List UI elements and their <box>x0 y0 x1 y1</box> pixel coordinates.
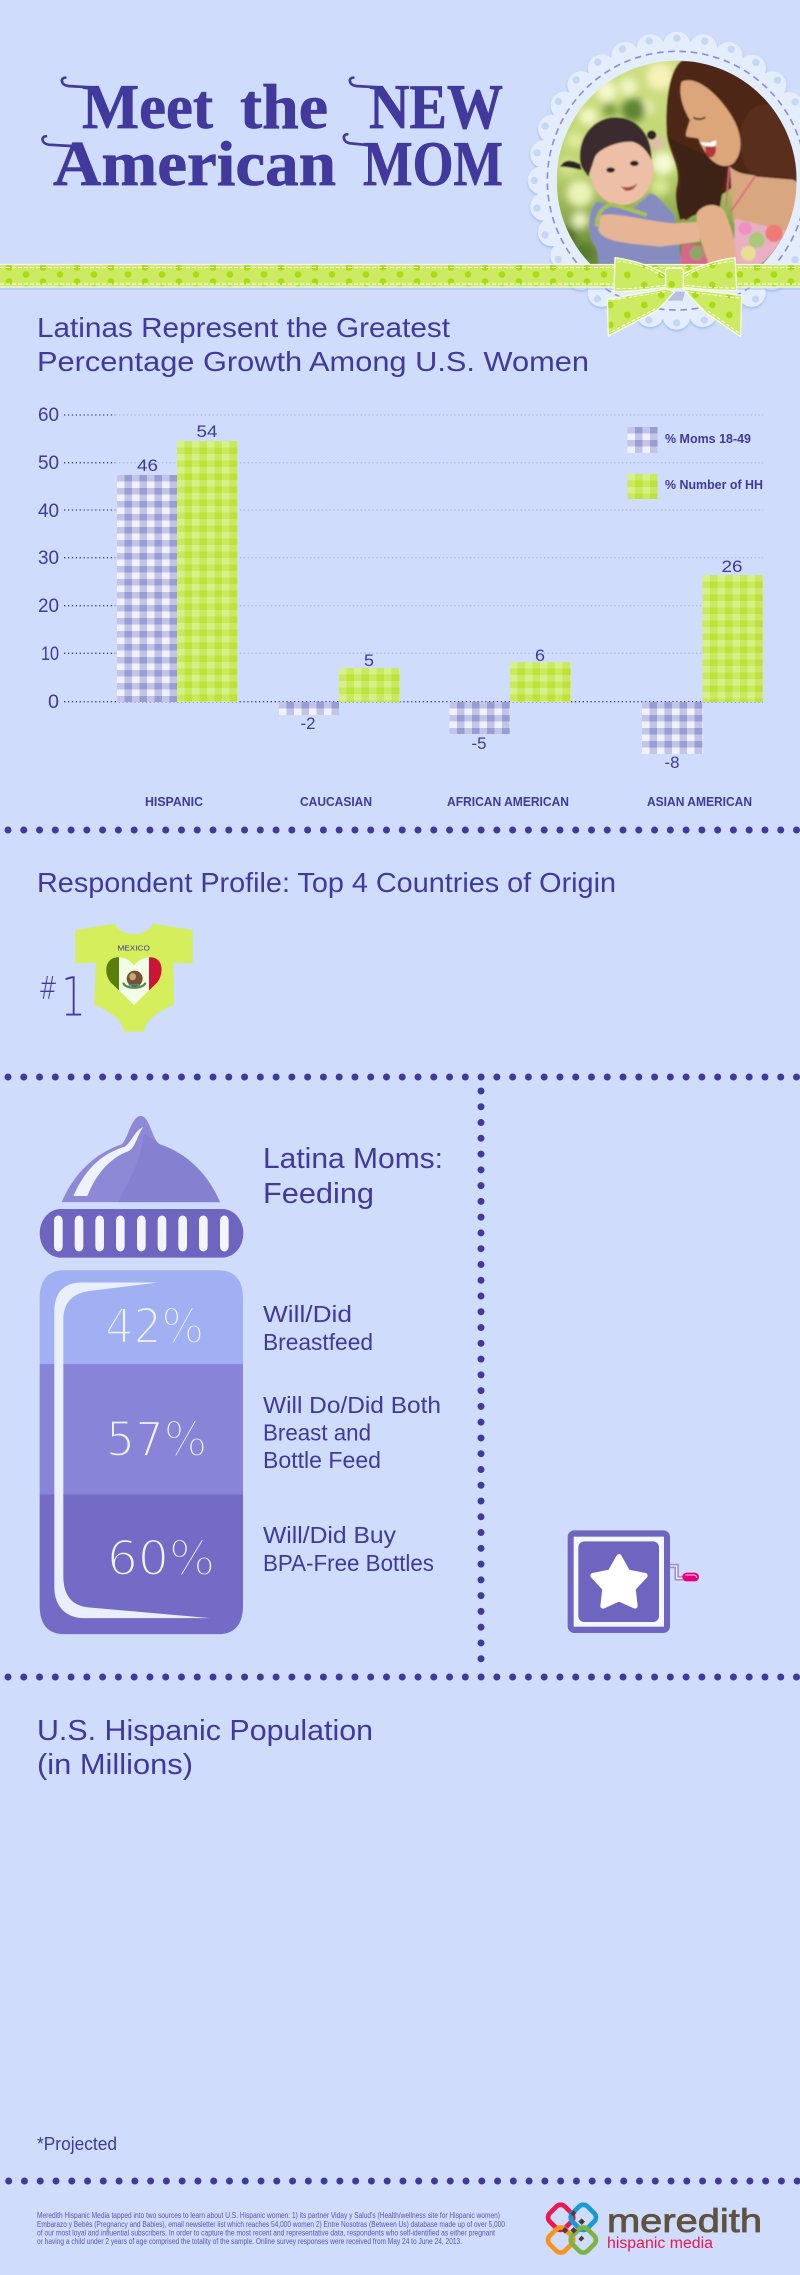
y-axis labels: 50 <box>38 453 59 474</box>
label: both breast and bottle: Will Do/Did Both <box>263 1392 441 1418</box>
label: breastfeed: Will/Did <box>263 1301 352 1327</box>
heading: U.S. Hispanic Population: U.S. Hispanic Population <box>37 1715 373 1747</box>
bow tails <box>607 289 742 337</box>
label: BPA-free bottles: BPA-Free Bottles <box>263 1550 434 1576</box>
y-axis labels: 30 <box>38 548 59 569</box>
heading: Percentage Growth Among U.S. Women: Percentage Growth Among U.S. Women <box>37 346 589 377</box>
rank: #1: 1 <box>60 963 86 1031</box>
methodology text: or having a child under 2 years of age comprised the totality of the sample. Online survey responses were received from May 24 to June 24, 2013. <box>37 2237 462 2246</box>
heading: U.S. Hispanic Population: (in Millions) <box>37 1749 193 1781</box>
methodology text <box>37 2211 506 2246</box>
value labels: 46 <box>137 456 158 475</box>
title: Meet the NEW American MOM <box>43 71 503 199</box>
methodology text: Meredith Hispanic Media tapped into two sources to learn about U.S. Hispanic women: 1) its partner Viday y Salud's (Health/wellness site for Hispanic women) <box>37 2211 500 2220</box>
y-axis labels: 0 <box>48 692 59 713</box>
bottle percentage: 57%: 57% <box>106 1412 207 1468</box>
title: Meet the NEW American MOM: NEW <box>369 71 503 142</box>
title: Meet the NEW American MOM: MOM <box>363 128 503 199</box>
category labels: CAUCASIAN <box>300 795 372 809</box>
bar chart <box>38 405 763 809</box>
value labels: -2 <box>300 714 316 733</box>
value labels: 54 <box>196 422 218 441</box>
bottle nipple <box>62 1116 220 1202</box>
bottle percentage: 60%: 60% <box>107 1531 215 1587</box>
methodology text: of our most loyal and influential subscribers. In order to capture the most recent and representative data, respondents who self-identified as either pregnant <box>37 2228 496 2238</box>
bottle percentage: 42%: 42% <box>105 1299 204 1355</box>
ribbon <box>0 264 800 290</box>
category labels: ASIAN AMERICAN <box>647 795 752 809</box>
methodology text: Embarazo y Bebés (Pregnancy and Babies), email newsletter list which reaches 54,000 women 2) Entre Nosotras (Between Us) database made up of over 5,000 <box>37 2220 506 2229</box>
icon: baby bottle <box>40 1116 243 1634</box>
label: both breast and bottle <box>263 1392 441 1473</box>
label: both breast and bottle: Bottle Feed <box>263 1447 381 1473</box>
heading: U.S. Hispanic Population <box>37 1715 373 1781</box>
title: Meet the NEW American MOM: the <box>240 71 328 142</box>
value labels: -8 <box>664 753 680 772</box>
bottle collar <box>40 1209 243 1258</box>
y-axis labels: 40 <box>38 501 59 522</box>
y-axis labels: 10 <box>41 644 59 665</box>
mother <box>666 57 800 220</box>
title: Meet the NEW American MOM: American <box>53 128 336 199</box>
doily lace <box>542 46 800 316</box>
label: both breast and bottle: Breast and <box>263 1420 371 1446</box>
label: breastfeed <box>263 1301 373 1355</box>
bars: Caucasian <box>279 668 400 715</box>
bars: Asian American <box>642 575 763 754</box>
logo: Meredith Hispanic Media: meredith <box>607 2202 762 2239</box>
value labels: 26 <box>722 557 742 576</box>
heading: Latina Moms: Feeding: Feeding <box>263 1178 374 1210</box>
label: BPA-free bottles: Will/Did Buy <box>263 1522 397 1548</box>
y-axis labels: 60 <box>38 405 59 426</box>
value labels: 6 <box>535 646 545 665</box>
legend: % Moms 18-49 <box>665 431 751 446</box>
heading: Latina Moms: Feeding: Latina Moms: <box>263 1143 443 1175</box>
logo: Meredith Hispanic Media <box>546 2202 762 2255</box>
bottle body <box>40 1270 243 1634</box>
bars: African American <box>450 662 571 734</box>
logo mark <box>546 2202 598 2255</box>
category labels: HISPANIC <box>145 795 203 809</box>
value labels <box>137 422 742 772</box>
icon: jack-in-the-box with star <box>568 1530 699 1633</box>
category labels <box>145 795 752 809</box>
label: breastfeed: Breastfeed <box>263 1329 373 1355</box>
photo medallion: lace doily with mother and baby <box>534 38 800 323</box>
photo of mother and baby <box>556 60 797 264</box>
bars: Hispanic <box>117 441 238 702</box>
bow loops <box>612 258 739 333</box>
rank: #1: # <box>38 968 58 1007</box>
footnote: projected: *Projected <box>37 2134 117 2154</box>
bow <box>607 258 742 337</box>
legend <box>628 427 763 499</box>
flag emblem <box>123 971 145 988</box>
legend: % Number of HH <box>665 477 763 492</box>
value labels: 5 <box>364 651 374 670</box>
heart flag <box>106 957 162 1005</box>
baby <box>589 193 682 270</box>
title: Meet the NEW American MOM: Meet <box>82 71 214 142</box>
category labels: AFRICAN AMERICAN <box>447 795 569 809</box>
y-axis labels: 20 <box>38 596 59 617</box>
icon: onesie with Mexico heart flag: MEXICO <box>117 944 150 953</box>
label: BPA-free bottles <box>263 1522 434 1576</box>
heading: Latina Moms: Feeding <box>263 1143 443 1210</box>
rank: #1 <box>38 963 86 1031</box>
y-axis labels <box>38 405 59 713</box>
heading: Respondent Profile: Respondent Profile: Top 4 Countries of Origin <box>37 867 616 898</box>
icon: onesie with Mexico heart flag <box>75 924 193 1032</box>
logo: Meredith Hispanic Media: hispanic media <box>607 2235 713 2252</box>
value labels: -5 <box>472 734 486 753</box>
heading: Latinas Represent the Greatest: Latinas Represent the Greatest <box>37 312 450 343</box>
